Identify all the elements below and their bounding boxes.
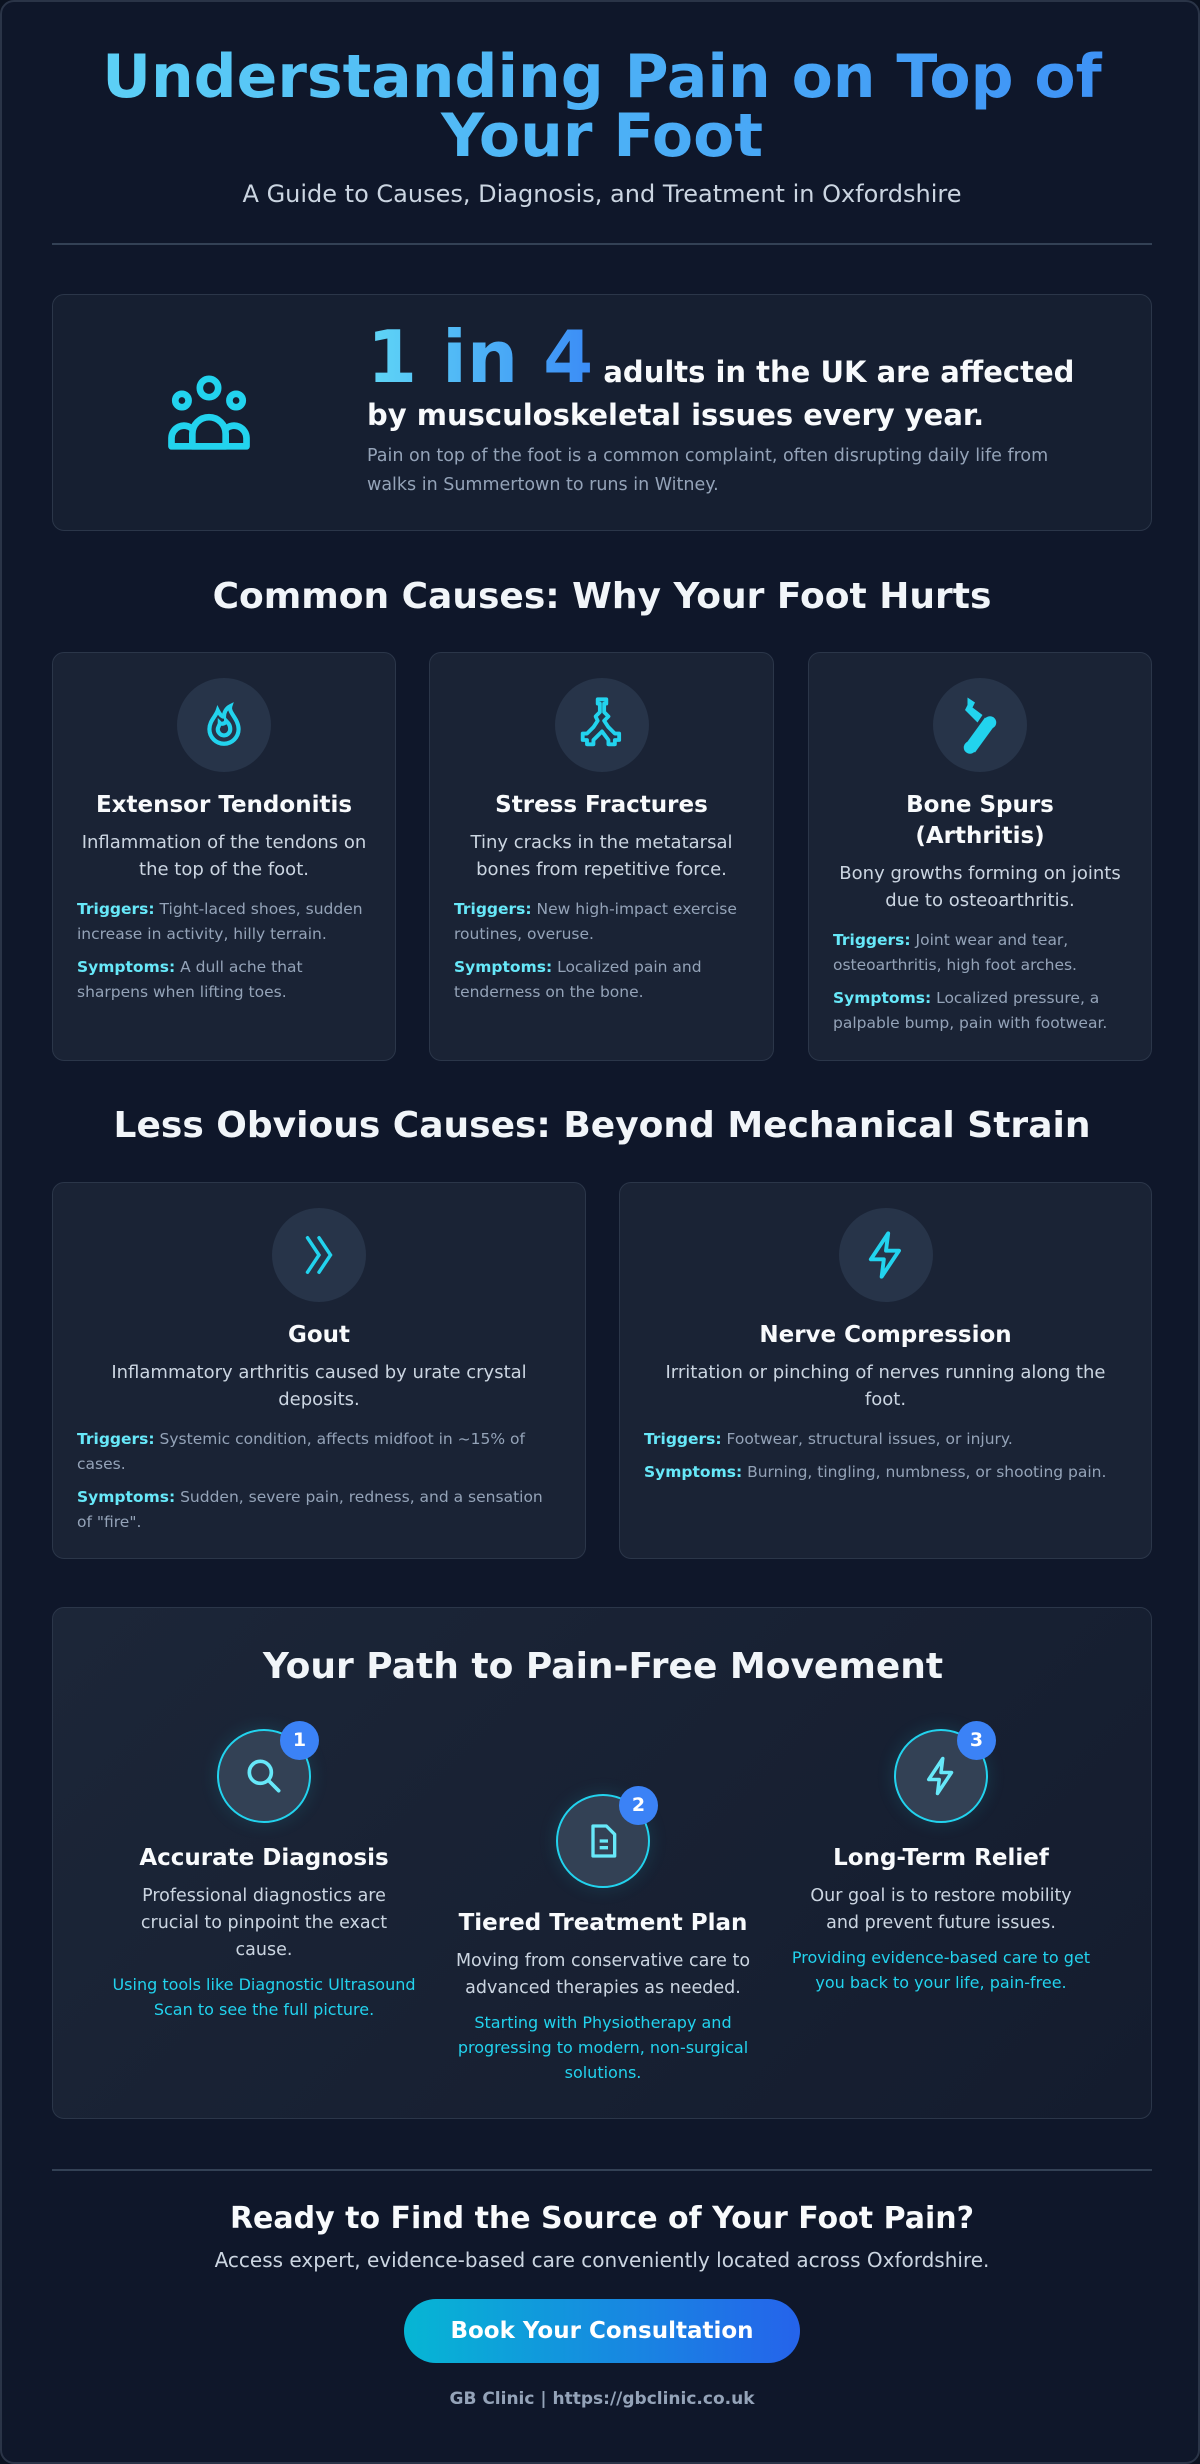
heading: path: Your Path to Pain-Free Movement [263, 1646, 943, 1687]
icon: people group [168, 376, 250, 450]
stat headline: 1 in 4 adults in the UK are affected by musculoskeletal issues every year. [367, 315, 1074, 432]
icon: chevrons [272, 1208, 366, 1302]
title: Your Foot [441, 101, 763, 171]
panel: nerve compression: Nerve Compression [759, 1322, 1012, 1348]
panel: gout: Gout [288, 1322, 350, 1348]
step 3: Long-Term Relief [833, 1845, 1049, 1871]
panel: stress fractures: Tiny cracks in the metatarsal bones from repetitive force. [471, 832, 732, 880]
step 1: Professional diagnostics are crucial to pinpoint the exact cause. [141, 1886, 387, 1960]
panel: path to pain-free movement [52, 1607, 1152, 2119]
title [2, 48, 1200, 166]
panel: nerve compression: Symptoms: Burning, tingling, numbness, or shooting pain. [644, 1463, 1106, 1481]
panel: bone spurs: Symptoms: Localized pressure, a palpable bump, pain with footwear. [833, 989, 1107, 1032]
step 1 [112, 1721, 416, 2019]
step 2: 2 [632, 1794, 645, 1816]
panel: extensor tendonitis: Symptoms: A dull ache that sharpens when lifting toes. [77, 958, 303, 1001]
title: Understanding Pain on Top of [102, 42, 1102, 112]
panel: gout: Symptoms: Sudden, severe pain, redness, and a sensation of "fire". [77, 1488, 543, 1531]
button: book consultation [404, 2299, 800, 2363]
stat description: Pain on top of the foot is a common complaint, often disrupting daily life from walks in Summertown to runs in Witney. [367, 446, 1048, 495]
panel: statistic [52, 294, 1152, 531]
panel: bone spurs: Bone Spurs [906, 792, 1054, 818]
panel: bone spurs: (Arthritis) [915, 823, 1045, 849]
panel: stress fractures [429, 652, 774, 1061]
step 2: Tiered Treatment Plan [459, 1910, 747, 1936]
CTA subtext: Access expert, evidence-based care conveniently located across Oxfordshire. [215, 2248, 989, 2272]
panel: gout: Inflammatory arthritis caused by urate crystal deposits. [111, 1362, 527, 1410]
icon: fractured bone [554, 678, 648, 772]
panel: stress fractures: Triggers: New high-impact exercise routines, overuse. [454, 900, 737, 943]
step 1: Using tools like Diagnostic Ultrasound Scan to see the full picture. [112, 1975, 416, 2019]
panel: bone spurs [808, 652, 1152, 1061]
step 2: Moving from conservative care to advanced therapies as needed. [456, 1951, 750, 1998]
heading: common causes: Common Causes: Why Your Foot Hurts [213, 576, 991, 617]
step 3: Our goal is to restore mobility and prevent future issues. [810, 1886, 1072, 1933]
panel: extensor tendonitis: Triggers: Tight-laced shoes, sudden increase in activity, hilly terrain. [77, 900, 363, 943]
step 1: Accurate Diagnosis [139, 1845, 389, 1871]
step 3: 3 [970, 1729, 983, 1751]
icon: lightning [838, 1208, 932, 1302]
heading: less obvious causes: Less Obvious Causes: Beyond Mechanical Strain [114, 1105, 1090, 1146]
step 2 [456, 1786, 750, 2082]
panel: extensor tendonitis: Extensor Tendonitis [96, 792, 352, 818]
step 2: Starting with Physiotherapy and progressing to modern, non-surgical solutions. [458, 2013, 748, 2082]
subtitle: A Guide to Causes, Diagnosis, and Treatment in Oxfordshire [243, 180, 961, 208]
step 3 [792, 1721, 1090, 1992]
panel: gout: Triggers: Systemic condition, affects midfoot in ~15% of cases. [77, 1430, 525, 1473]
icon: bone [933, 678, 1027, 772]
icon: flame [177, 678, 271, 772]
panel: extensor tendonitis [52, 652, 396, 1061]
step 1: 1 [293, 1729, 306, 1751]
panel: nerve compression [619, 1182, 1152, 1559]
panel: stress fractures: Symptoms: Localized pain and tenderness on the bone. [454, 958, 702, 1001]
panel: bone spurs: Bony growths forming on joints due to osteoarthritis. [839, 863, 1121, 911]
panel: nerve compression: Irritation or pinching of nerves running along the foot. [665, 1362, 1106, 1410]
CTA heading: Ready to Find the Source of Your Foot Pain? [230, 2201, 974, 2236]
panel: nerve compression: Triggers: Footwear, structural issues, or injury. [644, 1430, 1013, 1448]
panel: gout [52, 1182, 586, 1559]
footer: GB Clinic | https://gbclinic.co.uk [449, 2389, 755, 2409]
panel: extensor tendonitis: Inflammation of the tendons on the top of the foot. [82, 832, 366, 880]
panel: bone spurs: Triggers: Joint wear and tear, osteoarthritis, high foot arches. [833, 931, 1077, 974]
step 3: Providing evidence-based care to get you back to your life, pain-free. [792, 1948, 1090, 1992]
button: book consultation: Book Your Consultation [450, 2318, 754, 2344]
panel: stress fractures: Stress Fractures [495, 792, 708, 818]
